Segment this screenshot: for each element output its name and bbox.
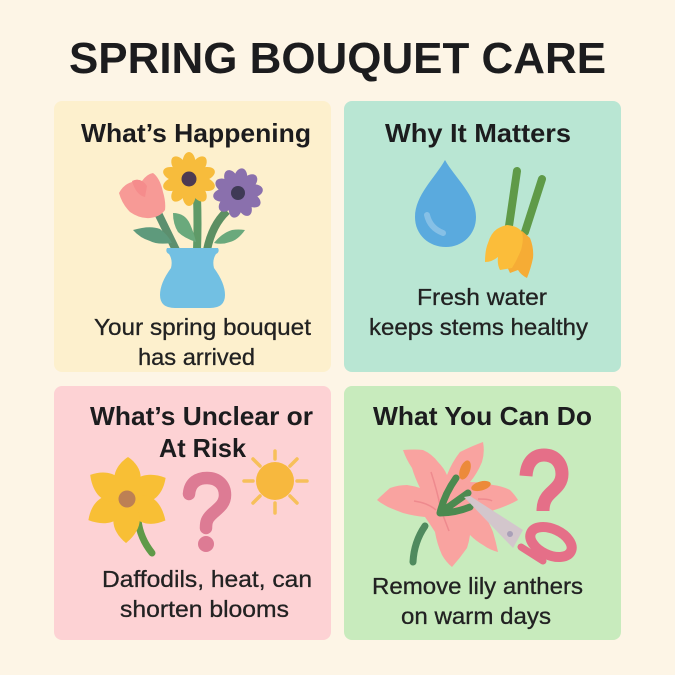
icon: question mark xyxy=(189,478,225,552)
icon: daffodil xyxy=(82,457,172,553)
text: your spring bouquet has arrived: Your spring bouquet xyxy=(94,314,312,340)
text: your spring bouquet has arrived xyxy=(94,314,312,370)
heading: what's happening: What’s Happening xyxy=(81,118,311,148)
panel: why it matters xyxy=(344,101,621,372)
icon: wilting yellow flower xyxy=(485,171,542,278)
icon: lily with scissors xyxy=(377,442,576,567)
heading: what you can do: What You Can Do xyxy=(373,401,592,431)
panel: what's happening xyxy=(54,101,331,372)
text: daffodils, heat, can shorten blooms xyxy=(102,566,312,622)
heading: what's unclear or at risk: At Risk xyxy=(159,433,247,463)
icon: water drop xyxy=(415,160,476,247)
text: daffodils, heat, can shorten blooms: Daffodils, heat, can xyxy=(102,566,312,592)
heading: what's unclear or at risk: What’s Unclear or xyxy=(90,401,313,431)
text: remove lily anthers on warm days xyxy=(372,573,583,629)
text: remove lily anthers on warm days: Remove lily anthers xyxy=(372,573,583,599)
text: daffodils, heat, can shorten blooms: shorten blooms xyxy=(120,596,289,622)
heading: what's unclear or at risk xyxy=(90,401,313,463)
text: fresh water keeps stems healthy xyxy=(369,284,589,340)
text: fresh water keeps stems healthy: Fresh water xyxy=(417,284,547,310)
panel: what you can do xyxy=(344,386,621,640)
icon: bouquet in vase xyxy=(119,152,264,308)
heading: why it matters: Why It Matters xyxy=(385,118,571,148)
text: remove lily anthers on warm days: on warm days xyxy=(401,603,551,629)
text: your spring bouquet has arrived: has arrived xyxy=(138,344,255,370)
title: SPRING BOUQUET CARE xyxy=(69,34,606,83)
panel: what's unclear or at risk xyxy=(54,386,331,640)
icon: question mark xyxy=(526,455,562,511)
icon: sun xyxy=(244,451,307,513)
text: fresh water keeps stems healthy: keeps stems healthy xyxy=(369,314,589,340)
